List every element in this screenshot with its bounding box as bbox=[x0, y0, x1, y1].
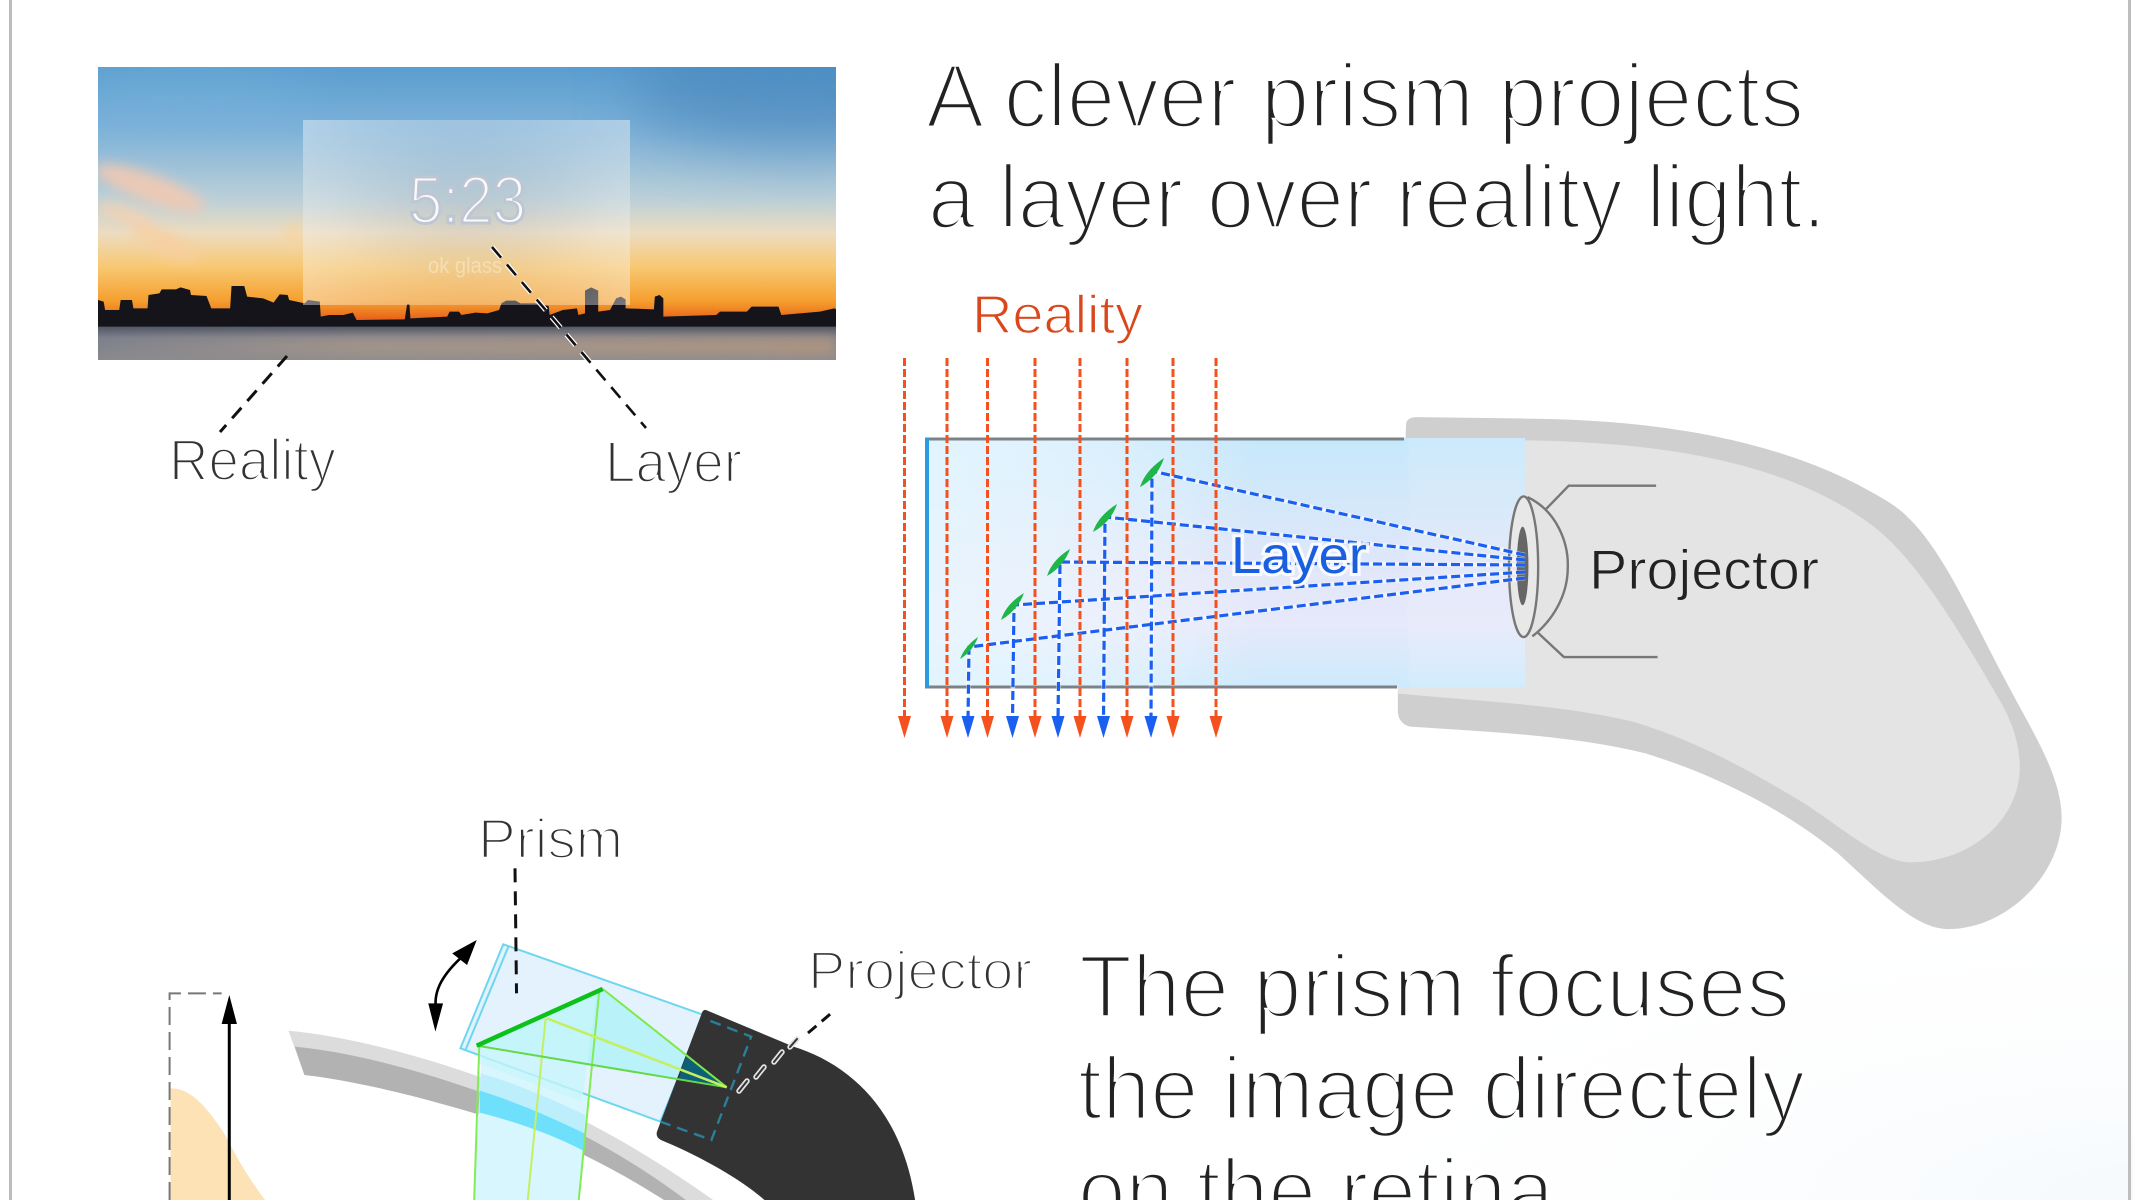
ok glass text: ok glass bbox=[428, 253, 502, 278]
heading: clever prism bbox=[926, 47, 1826, 248]
label: Prism: Prism bbox=[478, 807, 623, 870]
clock text: 5:23 bbox=[409, 163, 526, 238]
blue arrowheads bbox=[962, 716, 1158, 738]
label: Reality: Reality bbox=[169, 428, 336, 493]
photo: sunset skyline with overlay bbox=[98, 67, 836, 360]
projector internals and light paths bbox=[428, 868, 751, 1200]
page frame left bbox=[9, 0, 12, 1200]
leader line: layer bbox=[492, 247, 646, 428]
heading: clever prism: A clever prism projects bbox=[926, 47, 1804, 147]
label: Reality (orange): Reality bbox=[972, 285, 1143, 345]
blue projected light rays bbox=[968, 471, 1525, 720]
green mirrors bbox=[960, 458, 1164, 659]
green light paths bbox=[474, 989, 727, 1200]
heading: clever prism: a layer over reality light. bbox=[928, 148, 1826, 248]
height guide dashed bbox=[170, 993, 222, 1200]
projector housing side view bbox=[1398, 417, 2062, 929]
leader line: reality bbox=[220, 356, 287, 432]
heading: prism focuses: The prism focuses bbox=[1079, 936, 1790, 1036]
projector leader line bbox=[739, 1010, 835, 1091]
face and height guide bbox=[170, 993, 268, 1200]
heading: prism focuses: the image directely bbox=[1078, 1038, 1805, 1138]
orange reality light rays bbox=[898, 358, 1222, 738]
prism waveguide bar bbox=[925, 438, 1525, 688]
black projector housing bbox=[657, 1010, 916, 1200]
face profile bbox=[171, 1088, 268, 1200]
page frame right bbox=[2128, 0, 2131, 1200]
prism leader line bbox=[515, 868, 517, 993]
prism block bbox=[460, 944, 727, 1122]
tilt arrow bbox=[428, 940, 477, 1032]
label: Layer: Layer bbox=[605, 430, 742, 495]
label: Layer (blue): Layer bbox=[1231, 527, 1367, 585]
label: Layer (blue): Layer bbox=[1231, 527, 1367, 585]
heading: prism focuses bbox=[1078, 936, 1805, 1200]
label: Projector: Projector bbox=[1589, 538, 1819, 601]
skyline silhouette bbox=[98, 286, 838, 327]
eyeglass lens band and light beam bbox=[288, 1000, 718, 1200]
height arrow bbox=[222, 995, 237, 1200]
projector lens bbox=[1509, 486, 1658, 657]
translucent layer panel bbox=[303, 120, 630, 305]
label: Projector (lower): Projector bbox=[808, 941, 1032, 1001]
